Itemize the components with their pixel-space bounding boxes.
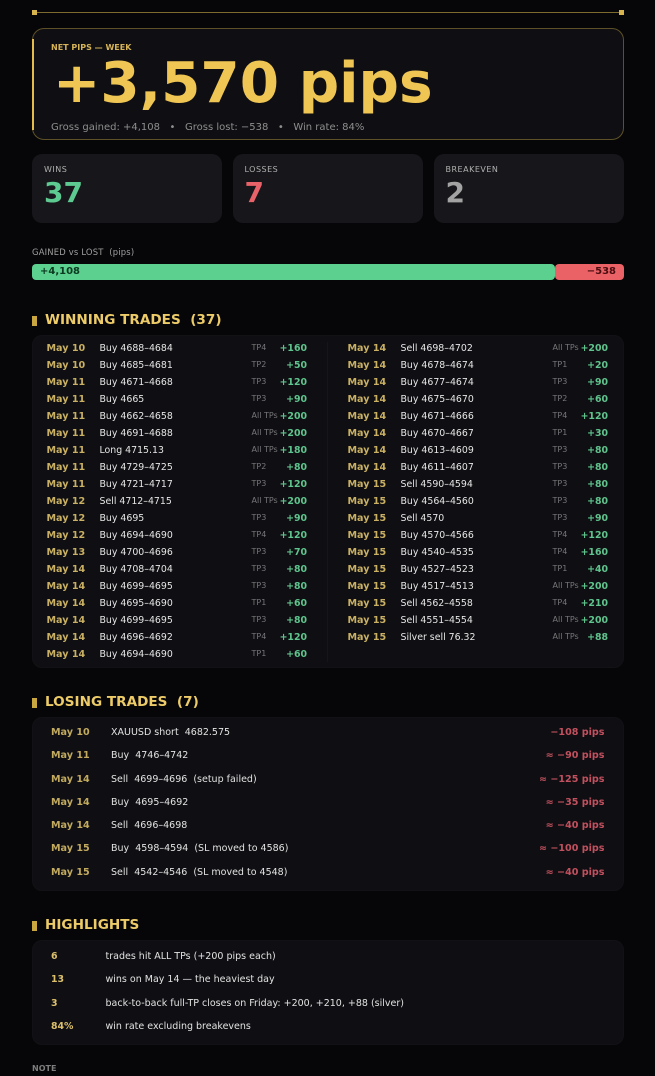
stat card: losses: 7: [244, 176, 264, 209]
winning trades left column: +160: [280, 343, 307, 354]
winning trades left column: +60: [286, 649, 307, 660]
winning trades right column: May 14: [348, 462, 386, 473]
winning trades left column: TP3: [252, 377, 266, 386]
winning trades left column: Buy 4694–4690: [100, 649, 173, 660]
panel: losing trades: ≈ −90 pips: [546, 750, 604, 761]
winning trades right column: +90: [587, 513, 608, 524]
winning trades left column: Buy 4721–4717: [100, 479, 173, 490]
column divider: [327, 342, 328, 662]
panel: losing trades: Buy 4695–4692: [111, 796, 188, 808]
winning trades right column: [348, 343, 608, 643]
winning trades right column: Sell 4590–4594: [400, 479, 473, 490]
panel: losing trades: May 15: [51, 843, 90, 854]
winning trades left column: Buy 4729–4725: [100, 462, 173, 473]
winning trades right column: May 15: [348, 479, 386, 490]
hero accent bar: [32, 39, 34, 130]
winning trades right column: TP2: [552, 394, 567, 403]
winning trades left column: +90: [286, 513, 307, 524]
winning trades right column: Silver sell 76.32: [400, 632, 476, 643]
winning trades left column: May 11: [46, 462, 85, 473]
winning trades left column: Buy 4662–4658: [100, 411, 173, 422]
panel: losing trades: May 14: [51, 820, 90, 831]
winning trades left column: Buy 4699–4695: [100, 615, 173, 626]
stat card: wins: WINS: [44, 165, 67, 174]
winning trades left column: +80: [286, 564, 307, 575]
winning trades right column: May 15: [348, 496, 386, 507]
winning trades right column: Buy 4540–4535: [400, 547, 474, 558]
panel: losing trades: May 11: [51, 750, 90, 761]
winning trades right column: Buy 4611–4607: [400, 462, 474, 473]
winning trades right column: TP1: [552, 564, 567, 573]
winning trades right column: +30: [587, 428, 608, 439]
panel: losing trades: Buy 4746–4742: [111, 750, 188, 761]
winning trades right column: Buy 4678–4674: [400, 360, 474, 371]
panel: highlights: 6: [51, 951, 58, 962]
winning trades left column: Buy 4695–4690: [100, 598, 173, 609]
winning trades right column: May 15: [348, 530, 386, 541]
winning trades right column: +200: [581, 581, 608, 592]
winning trades left column: Buy 4695: [100, 513, 144, 524]
winning trades left column: May 11: [46, 428, 85, 439]
winning trades left column: TP3: [252, 615, 266, 624]
winning trades left column: [46, 343, 307, 660]
winning trades left column: TP1: [252, 649, 266, 658]
winning trades left column: TP3: [252, 581, 266, 590]
winning trades right column: Buy 4564–4560: [400, 496, 474, 507]
winning trades left column: TP1: [252, 598, 266, 607]
panel: losing trades: ≈ −40 pips: [546, 866, 604, 878]
winning trades left column: All TPs: [252, 496, 278, 505]
panel: losing trades: Sell 4699–4696 (setup failed): [111, 774, 257, 784]
winning trades left column: TP4: [252, 530, 266, 539]
winning trades left column: Sell 4712–4715: [100, 496, 172, 507]
winning trades right column: TP3: [552, 479, 567, 488]
winning trades left column: TP3: [252, 394, 266, 403]
winning trades right column: May 14: [348, 343, 386, 354]
top rule: [32, 10, 624, 15]
winning trades left column: +180: [280, 445, 307, 456]
winning trades left column: May 12: [46, 513, 85, 524]
winning trades right column: +80: [587, 479, 608, 490]
heading: winning trades: WINNING TRADES (37): [45, 312, 222, 328]
winning trades left column: +70: [286, 547, 307, 558]
panel: losing trades: −108 pips: [550, 727, 604, 738]
winning trades left column: TP3: [252, 564, 266, 573]
panel: highlights: 13: [51, 974, 64, 985]
winning trades left column: May 13: [46, 547, 85, 558]
winning trades left column: Buy 4671–4668: [100, 377, 173, 388]
winning trades left column: Buy 4685–4681: [100, 360, 173, 371]
winning trades right column: TP3: [552, 377, 567, 386]
panel: highlights: 3: [51, 998, 58, 1008]
heading: losing trades: LOSING TRADES (7): [45, 694, 199, 710]
winning trades right column: +200: [581, 615, 608, 626]
panel: losing trades: Buy 4598–4594 (SL moved to 4586): [111, 843, 288, 854]
panel: highlights: wins on May 14 — the heaviest day: [106, 974, 275, 985]
winning trades left column: TP4: [252, 632, 266, 641]
winning trades right column: TP4: [552, 530, 567, 539]
winning trades right column: +20: [587, 360, 608, 371]
hero panel: net pips: [32, 28, 624, 140]
panel: losing trades: ≈ −35 pips: [546, 796, 604, 808]
panel: losing trades: May 10: [51, 727, 90, 738]
winning trades right column: Sell 4551–4554: [400, 615, 473, 626]
panel: losing trades: ≈ −40 pips: [546, 820, 604, 831]
panel: losing trades: [32, 717, 624, 891]
winning trades left column: All TPs: [252, 445, 278, 454]
winning trades right column: +60: [587, 394, 608, 405]
winning trades left column: TP3: [252, 479, 266, 488]
winning trades right column: TP4: [552, 547, 567, 556]
winning trades right column: May 14: [348, 428, 386, 439]
winning trades right column: TP3: [552, 462, 567, 471]
hero label: NET PIPS — WEEK: [51, 43, 131, 52]
winning trades left column: +90: [286, 394, 307, 405]
panel: losing trades: XAUUSD short 4682.575: [111, 727, 230, 738]
bar: gained: +4,108: [40, 266, 80, 277]
winning trades left column: +120: [280, 530, 307, 541]
hero summary: Gross gained: +4,108 • Gross lost: −538 • Win rate: 84%: [51, 122, 364, 133]
panel: losing trades: Sell 4696–4698: [111, 820, 187, 831]
winning trades left column: +80: [286, 615, 307, 626]
winning trades right column: TP1: [552, 360, 567, 369]
stat card: losses: [232, 154, 422, 223]
winning trades right column: +40: [587, 564, 608, 575]
winning trades right column: All TPs: [552, 615, 579, 624]
winning trades right column: Buy 4517–4513: [400, 581, 474, 592]
stat card: breakeven: BREAKEVEN: [446, 165, 498, 174]
winning trades left column: +120: [280, 632, 307, 643]
winning trades right column: Buy 4677–4674: [400, 377, 474, 388]
heading: highlights: HIGHLIGHTS: [45, 917, 139, 933]
winning trades left column: May 12: [46, 530, 85, 541]
panel: losing trades: May 14: [51, 774, 90, 784]
winning trades left column: Buy 4708–4704: [100, 564, 173, 575]
winning trades right column: Sell 4698–4702: [400, 343, 473, 354]
winning trades right column: May 14: [348, 394, 386, 405]
winning trades right column: May 14: [348, 360, 386, 371]
winning trades right column: May 14: [348, 377, 386, 388]
winning trades right column: TP4: [552, 598, 567, 607]
panel: losing trades: May 15: [51, 866, 90, 878]
winning trades left column: Buy 4688–4684: [100, 343, 173, 354]
winning trades left column: TP2: [252, 360, 266, 369]
winning trades right column: +80: [587, 445, 608, 456]
winning trades left column: May 14: [46, 649, 85, 660]
bar: lost: [555, 264, 624, 280]
panel: losing trades: ≈ −125 pips: [539, 774, 604, 784]
winning trades left column: All TPs: [252, 411, 278, 420]
winning trades left column: May 11: [46, 411, 85, 422]
winning trades right column: +120: [581, 411, 608, 422]
stat card: wins: [32, 154, 222, 223]
winning trades right column: +80: [587, 462, 608, 473]
winning trades left column: Buy 4691–4688: [100, 428, 173, 439]
winning trades left column: May 14: [46, 581, 85, 592]
bar: lost: −538: [587, 266, 616, 277]
panel: highlights: win rate excluding breakevens: [106, 1021, 251, 1032]
winning trades right column: Buy 4670–4667: [400, 428, 474, 439]
bar label: GAINED vs LOST (pips): [32, 247, 134, 257]
winning trades right column: TP1: [552, 428, 567, 437]
winning trades right column: May 15: [348, 564, 386, 575]
winning trades right column: Sell 4570: [400, 513, 444, 524]
winning trades left column: +60: [286, 598, 307, 609]
winning trades left column: May 14: [46, 598, 85, 609]
winning trades right column: Sell 4562–4558: [400, 598, 473, 609]
stat card: breakeven: [434, 154, 624, 223]
winning trades right column: +160: [581, 547, 608, 558]
winning trades left column: TP2: [252, 462, 266, 471]
winning trades left column: TP3: [252, 547, 266, 556]
winning trades right column: Buy 4675–4670: [400, 394, 474, 405]
winning trades right column: May 14: [348, 445, 386, 456]
winning trades right column: +88: [587, 632, 608, 643]
winning trades left column: May 10: [46, 360, 85, 371]
winning trades right column: Buy 4671–4666: [400, 411, 474, 422]
winning trades left column: May 11: [46, 479, 85, 490]
winning trades right column: +120: [581, 530, 608, 541]
winning trades left column: Buy 4696–4692: [100, 632, 173, 643]
winning trades left column: May 10: [46, 343, 85, 354]
winning trades left column: Buy 4700–4696: [100, 547, 173, 558]
winning trades right column: May 15: [348, 547, 386, 558]
panel: losing trades: May 14: [51, 796, 90, 808]
winning trades left column: +200: [280, 428, 307, 439]
panel: winning trades: [32, 335, 624, 668]
panel: highlights: back-to-back full-TP closes on Friday: +200, +210, +88 (silver): [106, 998, 404, 1008]
winning trades right column: All TPs: [552, 632, 579, 641]
winning trades left column: Buy 4699–4695: [100, 581, 173, 592]
winning trades right column: May 15: [348, 615, 386, 626]
panel: losing trades: ≈ −100 pips: [539, 843, 604, 854]
winning trades right column: +80: [587, 496, 608, 507]
panel: highlights: [32, 940, 624, 1045]
winning trades left column: May 14: [46, 615, 85, 626]
winning trades left column: +200: [280, 411, 307, 422]
winning trades left column: Buy 4694–4690: [100, 530, 173, 541]
stat card: losses: LOSSES: [244, 165, 278, 174]
winning trades left column: +120: [280, 377, 307, 388]
winning trades left column: +80: [286, 581, 307, 592]
winning trades right column: Buy 4613–4609: [400, 445, 474, 456]
note label: NOTE: [32, 1064, 56, 1073]
winning trades right column: TP3: [552, 445, 567, 454]
winning trades right column: May 14: [348, 411, 386, 422]
winning trades left column: +120: [280, 479, 307, 490]
winning trades right column: +200: [581, 343, 608, 354]
panel: highlights: 84%: [51, 1021, 73, 1032]
hero value: +3,570 pips: [53, 51, 433, 116]
winning trades right column: TP3: [552, 496, 567, 505]
winning trades left column: May 14: [46, 564, 85, 575]
winning trades left column: May 14: [46, 632, 85, 643]
stat card: wins: 37: [44, 176, 83, 209]
winning trades left column: All TPs: [252, 428, 278, 437]
winning trades right column: May 15: [348, 598, 386, 609]
winning trades right column: Buy 4527–4523: [400, 564, 474, 575]
winning trades right column: All TPs: [552, 581, 579, 590]
winning trades right column: +90: [587, 377, 608, 388]
winning trades left column: May 11: [46, 394, 85, 405]
winning trades left column: +50: [286, 360, 307, 371]
panel: losing trades: Sell 4542–4546 (SL moved to 4548): [111, 866, 287, 878]
panel: highlights: trades hit ALL TPs (+200 pips each): [106, 951, 276, 962]
winning trades left column: +200: [280, 496, 307, 507]
winning trades left column: TP4: [252, 343, 266, 352]
winning trades left column: May 12: [46, 496, 85, 507]
winning trades left column: Long 4715.13: [100, 445, 164, 456]
winning trades right column: All TPs: [552, 343, 579, 352]
winning trades right column: May 15: [348, 632, 386, 643]
winning trades right column: TP4: [552, 411, 567, 420]
winning trades left column: TP3: [252, 513, 266, 522]
winning trades right column: Buy 4570–4566: [400, 530, 474, 541]
winning trades right column: May 15: [348, 513, 386, 524]
winning trades left column: Buy 4665: [100, 394, 144, 405]
winning trades right column: +210: [581, 598, 608, 609]
winning trades left column: +80: [286, 462, 307, 473]
stat card: breakeven: 2: [446, 176, 465, 209]
bar: gained: [32, 264, 555, 280]
winning trades left column: May 11: [46, 445, 85, 456]
winning trades left column: May 11: [46, 377, 85, 388]
gained vs lost bar: [32, 264, 624, 280]
winning trades right column: TP3: [552, 513, 567, 522]
winning trades right column: May 15: [348, 581, 386, 592]
